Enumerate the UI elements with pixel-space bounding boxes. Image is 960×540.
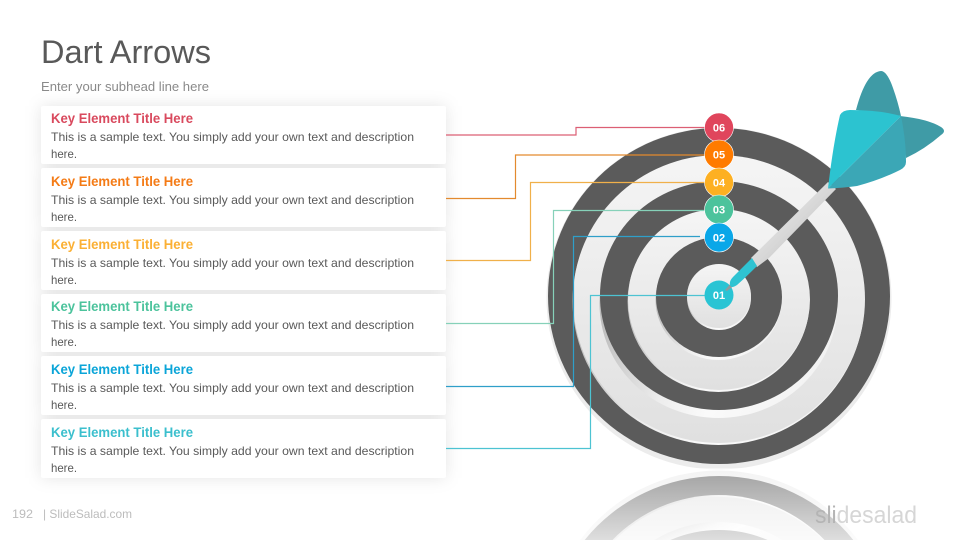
connector 05 — [446, 155, 706, 198]
logo: slidesalad: slidesalad — [815, 502, 917, 529]
badge 03: 03 — [713, 204, 725, 216]
page number and footer: 192 — [12, 507, 33, 521]
connector 02 — [446, 236, 700, 386]
connector 01 — [446, 296, 706, 448]
connector 06 — [446, 128, 706, 135]
badge 05 — [704, 140, 734, 169]
target reflection — [530, 468, 930, 540]
text block: element 03: here. — [51, 335, 77, 349]
badge 06 — [704, 113, 734, 142]
text block: element 05: This is a sample text. You simply add your own text and description — [51, 193, 414, 207]
badge 01: 01 — [713, 290, 725, 302]
panel: element 04 card — [41, 231, 446, 290]
connector 03 — [446, 210, 706, 324]
badge 03 — [704, 195, 734, 224]
panel: element 02 card — [41, 356, 446, 415]
badge 06: 06 — [713, 122, 725, 134]
text block: element 05 — [51, 193, 414, 224]
badge 05: 05 — [713, 150, 725, 162]
front flight dark half — [828, 116, 906, 188]
panel: element 01 card — [41, 419, 446, 478]
panel: element 06 card — [41, 106, 446, 164]
text block: element 05: here. — [51, 210, 77, 224]
text block: element 02 — [51, 381, 414, 412]
dart barrel tip — [730, 258, 757, 287]
title: Dart Arrows — [41, 34, 211, 70]
dart shaft — [751, 182, 836, 267]
text block: element 04: here. — [51, 273, 77, 287]
text block: element 04: This is a sample text. You simply add your own text and description — [51, 256, 414, 270]
text block: element 06: This is a sample text. You simply add your own text and description — [51, 130, 414, 144]
heading: element 05: Key Element Title Here — [51, 173, 193, 189]
text block: element 01: here. — [51, 461, 77, 475]
card shadows — [41, 106, 446, 478]
heading: element 06: Key Element Title Here — [51, 110, 193, 126]
text block: element 02: This is a sample text. You simply add your own text and description — [51, 381, 414, 395]
text block: element 03: This is a sample text. You simply add your own text and description — [51, 318, 414, 332]
heading: element 02: Key Element Title Here — [51, 361, 193, 377]
back flight right — [900, 116, 944, 158]
heading: element 01: Key Element Title Here — [51, 424, 193, 440]
text block: element 02: here. — [51, 398, 77, 412]
text block: element 01 — [51, 444, 414, 475]
panel: element 03 card — [41, 294, 446, 352]
badge 04 — [704, 168, 734, 197]
connector 04 — [446, 182, 706, 260]
back flight top — [856, 71, 901, 116]
badge 02: 02 — [713, 232, 725, 244]
text block: element 06 — [51, 130, 414, 161]
heading: element 03: Key Element Title Here — [51, 298, 193, 314]
connector lines — [446, 128, 706, 448]
text block: element 01: This is a sample text. You simply add your own text and description — [51, 444, 414, 458]
text block: element 06: here. — [51, 147, 77, 161]
target board — [546, 128, 892, 470]
badge 02 — [704, 223, 734, 252]
dart needle — [725, 282, 735, 291]
text block: element 04 — [51, 256, 414, 287]
icon: dart arrow — [725, 71, 944, 291]
page number and footer: | SlideSalad.com — [43, 507, 132, 521]
heading: element 04: Key Element Title Here — [51, 236, 193, 252]
badge 04: 04 — [713, 178, 726, 190]
subtitle: Enter your subhead line here — [41, 80, 209, 94]
front flight light half — [828, 110, 901, 188]
panel: element 05 card — [41, 168, 446, 227]
text block: element 03 — [51, 318, 414, 349]
badge 01 — [704, 280, 734, 310]
